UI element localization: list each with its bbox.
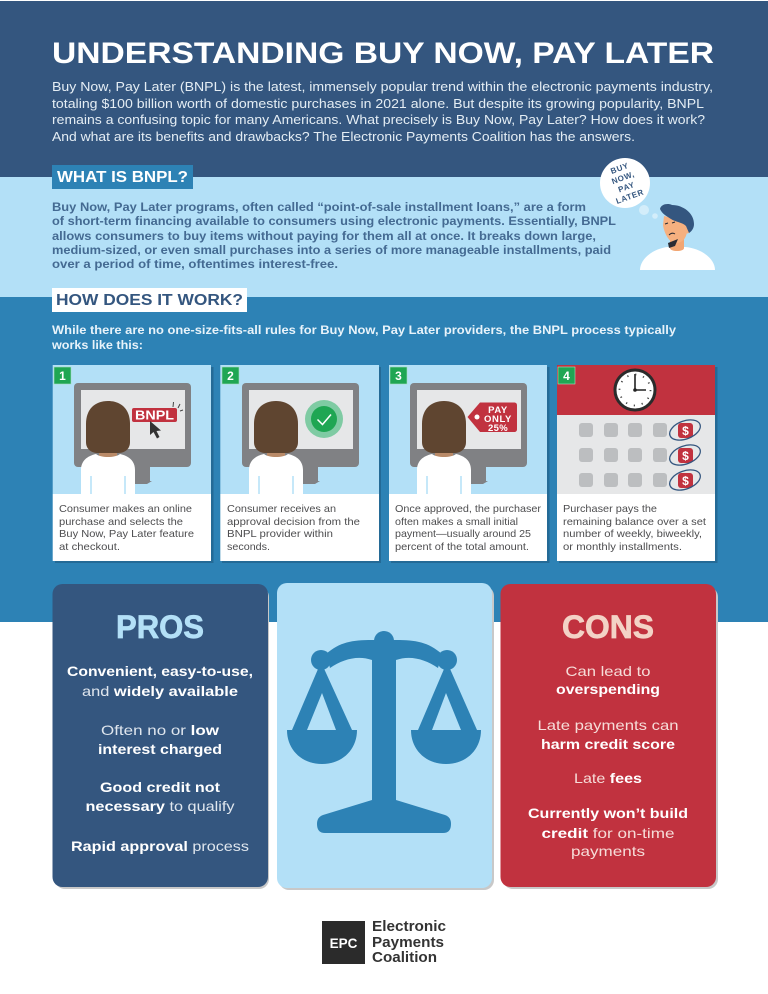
- caption 3: often makes a small initial: [395, 516, 518, 528]
- caption 2: seconds.: [227, 541, 270, 553]
- heading: cons: CONS: [562, 609, 654, 645]
- background: mid blue band: [0, 297, 768, 622]
- panel: scales: [277, 583, 494, 890]
- icon: clock: [615, 370, 655, 410]
- caption 3: percent of the total amount.: [395, 541, 529, 553]
- cons list: Currently won’t build: [528, 805, 688, 821]
- cons list: overspending: [556, 681, 660, 697]
- icon: thinking person with thought bubble: PAY: [617, 180, 636, 194]
- calendar grid with dollar marks: $: [682, 449, 689, 463]
- number badge 1: 1: [59, 369, 66, 383]
- pros list: and widely available: [82, 683, 238, 699]
- calendar grid with dollar marks: [579, 416, 703, 494]
- panel: step 3: [389, 365, 550, 563]
- illustration: monitor with pay only 25% tag: PAY: [488, 405, 508, 416]
- background: navy header band: [0, 1, 768, 177]
- logo: Electronic Payments Coalition: Coalition: [372, 950, 437, 966]
- intro text block: [52, 80, 713, 144]
- heading: what is BNPL: WHAT IS BNPL?: [57, 169, 188, 186]
- cons list: payments: [571, 843, 645, 859]
- number badge 4: 4: [563, 369, 570, 383]
- number badge 2: 2: [227, 369, 234, 383]
- calendar grid with dollar marks: $: [682, 424, 689, 438]
- caption 2: BNPL provider within: [227, 528, 333, 540]
- illustration: monitor with pay only 25% tag: ONLY: [484, 414, 512, 425]
- what is BNPL text block: over a period of time, oftentimes interest-free.: [52, 257, 338, 271]
- heading: how does it work: HOW DOES IT WORK?: [56, 292, 243, 309]
- intro text block: And what are its benefits and drawbacks? The Electronic Payments Coalition has the answers.: [52, 130, 635, 144]
- cons list: Late fees: [574, 770, 642, 786]
- icon: balance scales: [287, 631, 481, 833]
- what is BNPL text block: allows consumers to buy items without paying for them all at once. It breaks down large,: [52, 229, 596, 243]
- what is BNPL text block: medium-sized, or even small purchases into a series of more manageable installments, paid: [52, 243, 611, 257]
- logo: Electronic Payments Coalition: Electronic: [372, 919, 446, 935]
- caption 3: payment—usually around 25: [395, 528, 531, 540]
- cons list: credit for on-time: [542, 825, 675, 841]
- cons list: Can lead to: [566, 663, 651, 679]
- illustration: monitor with BNPL button: [74, 383, 191, 494]
- caption 4: Purchaser pays the: [563, 503, 657, 515]
- intro text block: remains a confusing topic for many Americans. What precisely is Buy Now, Pay Later? How does it work?: [52, 113, 705, 127]
- caption 1: at checkout.: [59, 541, 120, 553]
- icon: thinking person with thought bubble: BUY: [609, 161, 630, 176]
- pros list: [67, 663, 253, 854]
- icon: thinking person with thought bubble: NOW,: [610, 170, 636, 186]
- number badge 2: [222, 367, 239, 384]
- background: light blue band: [0, 177, 768, 297]
- illustration: monitor with pay only 25% tag: [410, 383, 527, 494]
- caption 3: Once approved, the purchaser: [395, 503, 542, 515]
- logo: Electronic Payments Coalition: [322, 919, 446, 966]
- panel: step 4: [557, 365, 718, 563]
- number badge 4: [558, 367, 575, 384]
- caption 1: Buy Now, Pay Later feature: [59, 528, 194, 540]
- panel: step 1: [53, 365, 214, 563]
- heading: pros: PROS: [116, 609, 204, 645]
- what is BNPL text block: Buy Now, Pay Later programs, often called “point-of-sale installment loans,” are a form: [52, 200, 586, 214]
- what is BNPL text block: of short-term financing available to consumers using electronic payments. Essentially, BNPL: [52, 214, 616, 228]
- pros list: Rapid approval process: [71, 838, 249, 854]
- cons list: Late payments can: [538, 717, 678, 733]
- icon: thinking person with thought bubble: LATER: [615, 187, 645, 206]
- illustration: monitor with BNPL button: BNPL: [135, 408, 174, 422]
- caption 4: number of weekly, biweekly,: [563, 528, 702, 540]
- icon: thinking person with thought bubble: [600, 158, 715, 270]
- calendar grid with dollar marks: $: [682, 474, 689, 488]
- panel: cons: [500, 584, 718, 889]
- logo: Electronic Payments Coalition: EPC: [330, 936, 358, 951]
- pros list: interest charged: [98, 741, 222, 757]
- heading: what is BNPL: [52, 165, 193, 189]
- caption 4: remaining balance over a set: [563, 516, 706, 528]
- caption 2: [227, 503, 360, 553]
- caption 2: approval decision from the: [227, 516, 360, 528]
- number badge 3: [390, 367, 407, 384]
- illustration: monitor with pay only 25% tag: 25%: [488, 423, 508, 434]
- intro text block: totaling $100 billion worth of domestic purchases in 2021 alone. But despite its growing popularity, BNPL: [52, 97, 704, 111]
- heading: how does it work: [52, 288, 247, 312]
- pros list: Good credit not: [100, 779, 220, 795]
- panel: step 2: [220, 365, 381, 563]
- pros list: necessary to qualify: [86, 798, 234, 814]
- cons list: [528, 663, 688, 859]
- how it works intro text: While there are no one-size-fits-all rules for Buy Now, Pay Later providers, the BNPL process typically: [52, 323, 676, 337]
- caption 4: or monthly installments.: [563, 541, 682, 553]
- number badge 1: [54, 367, 71, 384]
- panel: pros: [52, 584, 269, 889]
- illustration: monitor with approval check: [242, 383, 359, 494]
- caption 1: Consumer makes an online: [59, 503, 192, 515]
- pros list: Often no or low: [101, 722, 219, 738]
- pros list: Convenient, easy-to-use,: [67, 663, 253, 679]
- caption 3: [395, 503, 542, 553]
- caption 2: Consumer receives an: [227, 503, 336, 515]
- title: UNDERSTANDING BUY NOW, PAY LATER: [52, 37, 714, 70]
- number badge 3: 3: [395, 369, 402, 383]
- what is BNPL text block: [52, 200, 616, 271]
- cons list: harm credit score: [541, 736, 675, 752]
- logo: Electronic Payments Coalition: Payments: [372, 935, 444, 951]
- caption 1: [59, 503, 194, 553]
- how it works intro text: [51, 323, 676, 352]
- caption 4: [563, 503, 706, 553]
- intro text block: Buy Now, Pay Later (BNPL) is the latest, immensely popular trend within the electronic payments industry,: [52, 80, 713, 94]
- how it works intro text: works like this:: [51, 338, 143, 352]
- caption 1: purchase and selects the: [59, 516, 183, 528]
